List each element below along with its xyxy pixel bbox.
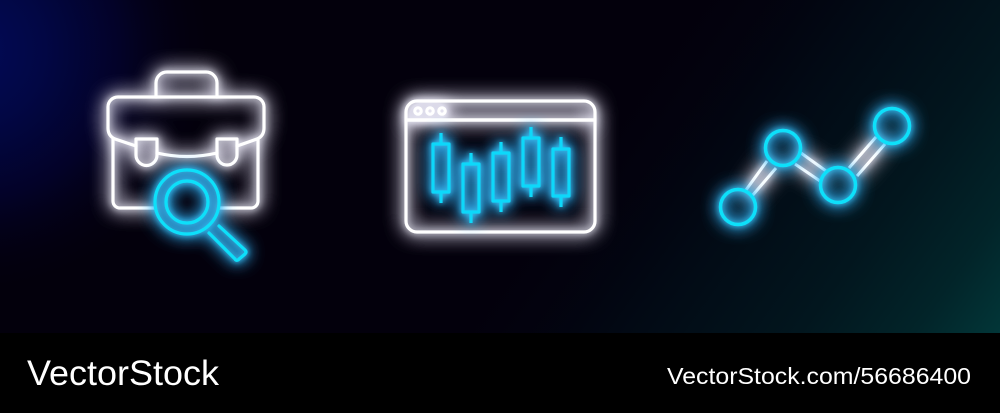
candlesticks [433, 127, 569, 223]
chart nodes [720, 108, 910, 224]
footer bar [0, 333, 1000, 413]
magnifying glass [155, 170, 246, 260]
icon: browser window with candlestick chart [406, 101, 595, 232]
browser window frame [406, 101, 595, 232]
connecting double lines [746, 137, 885, 196]
briefcase outline [108, 72, 264, 208]
footer image id text: VectorStock.com/56686400 [667, 363, 971, 389]
icon: line chart with nodes [720, 108, 910, 224]
icon: briefcase with magnifying glass [108, 72, 264, 260]
footer logo text: VectorStock [27, 353, 219, 393]
